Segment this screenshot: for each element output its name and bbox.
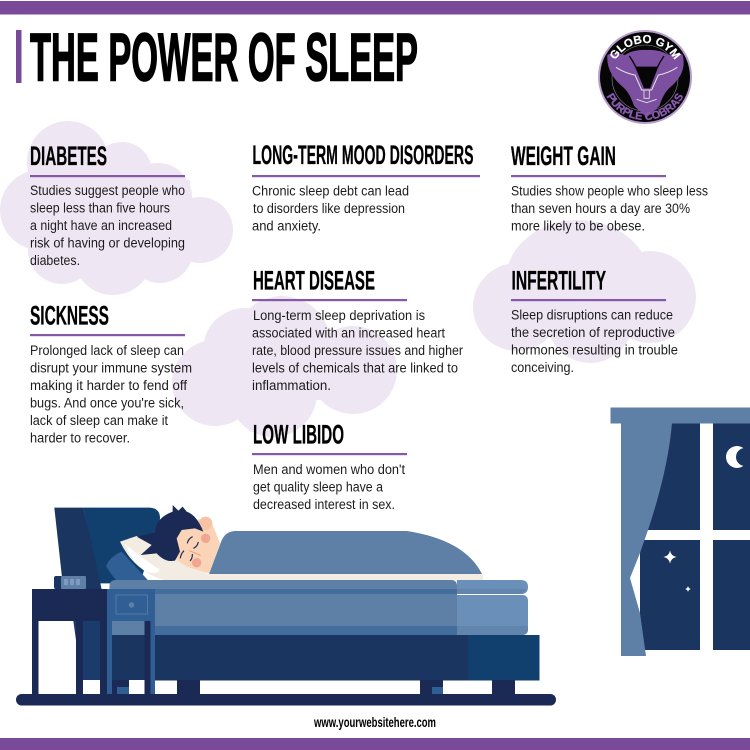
body: sickness: Prolonged lack of sleep can xyxy=(30,343,184,358)
heading: infertility: INFERTILITY xyxy=(512,266,606,296)
sleeping head and pillow xyxy=(106,505,220,581)
body: heart disease: inflammation. xyxy=(252,378,331,393)
body: sickness: bugs. And once you're sick, xyxy=(30,396,184,410)
bed frame end panel xyxy=(107,589,177,694)
body: sickness: making it harder to fend off xyxy=(30,378,187,393)
window panes xyxy=(640,423,750,650)
body: low libido: Men and women who don't xyxy=(253,462,405,477)
cloud: infertility xyxy=(473,220,696,363)
section: low libido xyxy=(252,420,407,512)
logo bottom text: PURPLE COBRAS xyxy=(606,92,683,120)
face xyxy=(177,519,220,573)
body: infertility xyxy=(511,308,678,375)
section: sickness xyxy=(30,300,192,446)
body: diabetes: diabetes. xyxy=(30,253,80,268)
section: diabetes xyxy=(30,141,185,268)
rule xyxy=(511,175,666,177)
body: low libido xyxy=(253,462,405,512)
nightstand xyxy=(32,589,107,694)
body: sickness: harder to recover. xyxy=(30,430,130,446)
body: diabetes: sleep less than five hours xyxy=(30,200,170,216)
body: mood disorders: to disorders like depression xyxy=(253,201,405,216)
alarm clock xyxy=(54,576,86,589)
body: diabetes: risk of having or developing xyxy=(30,236,185,250)
section: weight gain xyxy=(511,141,708,234)
section: long-term mood disorders xyxy=(252,140,480,234)
section: heart disease xyxy=(252,266,463,393)
rule xyxy=(30,334,185,336)
heading: heart disease: HEART DISEASE xyxy=(253,266,375,296)
heading: weight gain: WEIGHT GAIN xyxy=(511,141,616,171)
title accent bar xyxy=(16,30,22,83)
body: heart disease: levels of chemicals that are linked to xyxy=(252,360,458,376)
body: heart disease: Long-term sleep deprivation is xyxy=(253,308,425,323)
website footer: www.yourwebsitehere.com xyxy=(313,715,436,730)
rule xyxy=(30,175,185,177)
heading: mood disorders: LONG-TERM MOOD DISORDERS xyxy=(252,140,474,170)
pillow xyxy=(120,536,208,580)
body: mood disorders: Chronic sleep debt can lead xyxy=(252,184,409,198)
curtain rod xyxy=(610,408,750,424)
top purple band xyxy=(0,1,750,14)
heading: sickness: SICKNESS xyxy=(30,300,109,330)
body: weight gain: more likely to be obese. xyxy=(511,218,645,234)
body: heart disease: rate, blood pressure issues and higher xyxy=(252,343,463,358)
heading: diabetes: DIABETES xyxy=(30,141,107,171)
bed base xyxy=(155,635,540,680)
stars xyxy=(664,550,691,592)
pillow back xyxy=(106,552,148,581)
body: heart disease xyxy=(252,308,463,393)
body: diabetes: Studies suggest people who xyxy=(30,183,185,198)
rule xyxy=(252,299,407,301)
drawer xyxy=(116,595,148,614)
heading: low libido: LOW LIBIDO xyxy=(253,420,344,450)
body: sickness: lack of sleep can make it xyxy=(30,413,168,428)
body: diabetes xyxy=(30,183,185,268)
rule xyxy=(511,299,666,301)
body: weight gain: than seven hours a day are 30% xyxy=(511,201,690,216)
hair xyxy=(137,505,203,561)
rule xyxy=(252,453,407,455)
body: mood disorders xyxy=(252,184,409,234)
body: weight gain xyxy=(511,184,708,234)
body: diabetes: a night have an increased xyxy=(30,218,172,233)
body: infertility: conceiving. xyxy=(511,360,574,375)
body: infertility: the secretion of reproductive xyxy=(511,325,675,340)
logo top text: GLOBO GYM xyxy=(610,34,681,60)
bed legs xyxy=(177,680,515,694)
body: low libido: get quality sleep have a xyxy=(253,480,384,494)
blanket xyxy=(209,531,482,574)
moon xyxy=(726,446,750,468)
curtain xyxy=(621,423,672,656)
body: low libido: decreased interest in sex. xyxy=(253,497,395,512)
body: infertility: Sleep disruptions can reduce xyxy=(511,308,673,322)
headboard xyxy=(54,508,160,680)
logo cobra xyxy=(607,50,684,117)
rule xyxy=(252,175,480,177)
body: infertility: hormones resulting in trouble xyxy=(511,342,678,358)
illustration: person sleeping in bed xyxy=(16,505,556,706)
sheet xyxy=(208,574,483,580)
cloud: diabetes xyxy=(0,121,233,295)
body: heart disease: associated with an increased heart xyxy=(252,326,445,340)
section: infertility xyxy=(511,266,678,375)
title xyxy=(16,20,418,96)
cloud: heart disease xyxy=(172,296,397,437)
body: weight gain: Studies show people who sleep less xyxy=(511,184,708,198)
body: sickness xyxy=(30,343,192,446)
body: sickness: disrupt your immune system xyxy=(30,360,192,376)
window with curtain xyxy=(610,408,750,656)
body: mood disorders: and anxiety. xyxy=(252,218,321,234)
mattress xyxy=(110,580,528,635)
logo: Globo Gym Purple Cobras xyxy=(598,30,692,124)
floor bar xyxy=(16,694,556,706)
bottom purple band xyxy=(0,738,750,750)
